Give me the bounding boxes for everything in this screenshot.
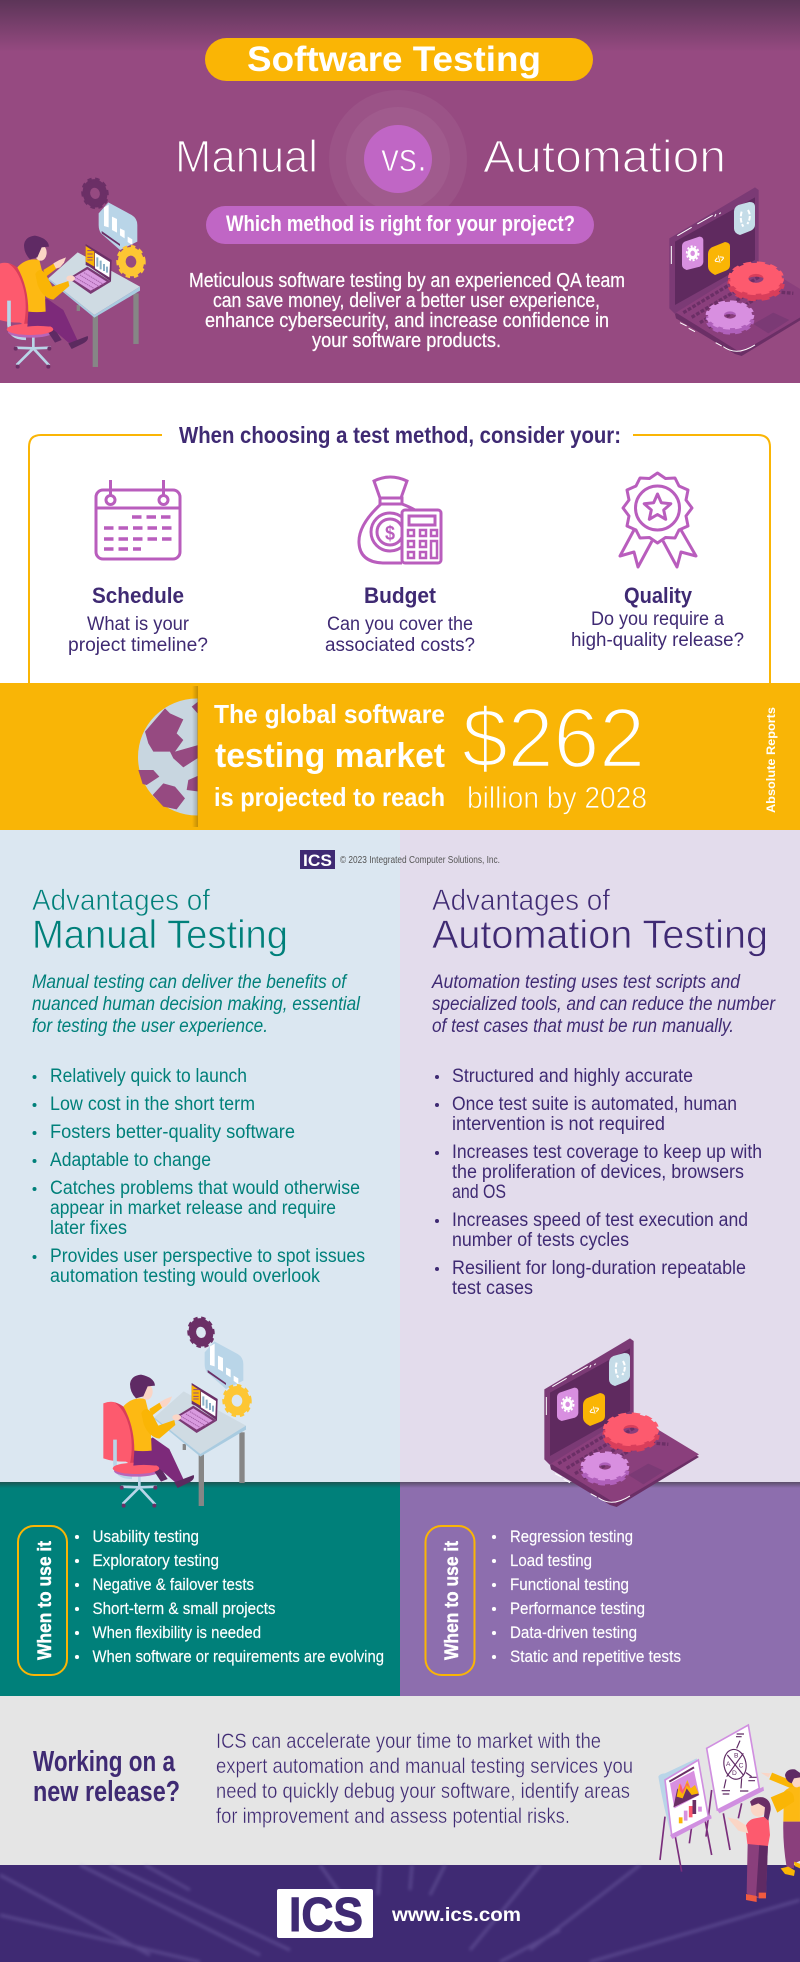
illustration: person at desk, lower: [103, 1315, 253, 1508]
heading: Automation Testing: [432, 913, 768, 957]
website: www.ics.com: [391, 1905, 521, 1926]
item: schedule: [68, 480, 208, 656]
use-case list: Functional testing: [510, 1575, 629, 1594]
panel: footer: [0, 1865, 800, 1962]
item: budget: Can you cover the: [327, 614, 473, 635]
panel: manual when to use: [0, 1482, 400, 1696]
stat lead-in text: testing market: [215, 737, 445, 775]
label: when to use it: When to use it: [35, 1540, 56, 1660]
heading: consider: When choosing a test method, consider your:: [179, 422, 621, 448]
bullet list: number of tests cycles: [452, 1230, 629, 1251]
CTA heading: Working on a: [33, 1746, 176, 1778]
stat unit: billion by 2028: [467, 780, 647, 815]
CTA paragraph: need to quickly debug your software, identify areas: [216, 1780, 630, 1803]
CTA heading: [33, 1746, 180, 1808]
bullet list: test cases: [452, 1278, 533, 1299]
illustration: team at easels: A: [726, 1761, 731, 1768]
intro paragraph: Meticulous software testing by an experienced QA team: [189, 270, 625, 292]
item: budget: Budget: [364, 583, 437, 608]
stat lead-in text: [214, 699, 445, 812]
illustration: team at easels: C: [739, 1762, 744, 1769]
title pill: Software Testing: [247, 40, 541, 79]
item: quality: Quality: [624, 583, 693, 608]
copyright logo and notice: ICS: [303, 851, 332, 870]
item: quality: Do you require a: [591, 609, 724, 630]
item: quality: high-quality release?: [571, 630, 744, 651]
illustration: team at easels: D: [732, 1770, 737, 1777]
label: when to use it: [426, 1526, 474, 1675]
description: [32, 972, 361, 1037]
heading: Manual: Manual: [175, 131, 318, 182]
panel: considerations: [0, 383, 800, 683]
item: budget: $: [385, 523, 395, 545]
use-case list: Short-term & small projects: [92, 1599, 276, 1618]
description: Manual testing can deliver the benefits of: [32, 972, 348, 993]
copyright logo and notice: © 2023 Integrated Computer Solutions, Inc.: [340, 855, 500, 866]
description: for testing the user experience.: [32, 1016, 268, 1037]
description: of test cases that must be run manually.: [432, 1016, 734, 1037]
panel: header: [0, 0, 800, 383]
bullet list: automation testing would overlook: [50, 1266, 320, 1287]
intro paragraph: your software products.: [312, 330, 501, 352]
illustration: team at easels: [658, 1725, 800, 1902]
bullet list: and OS: [452, 1182, 506, 1203]
ICS logo: ICS: [289, 1889, 363, 1942]
CTA paragraph: ICS can accelerate your time to market with the: [216, 1730, 601, 1753]
panel: automation when to use: [400, 1482, 800, 1696]
illustration: team at easels: B: [734, 1752, 739, 1759]
bullet list: the proliferation of devices, browsers: [452, 1162, 744, 1183]
item: budget: associated costs?: [325, 635, 475, 656]
stat lead-in text: is projected to reach: [214, 782, 445, 812]
CTA paragraph: expert automation and manual testing services you: [216, 1755, 633, 1778]
source: Absolute Reports: [764, 707, 778, 813]
heading: Advantages of: [32, 884, 211, 917]
bullet list: Structured and highly accurate: [452, 1066, 693, 1087]
panel: call to action: [0, 1696, 800, 1865]
label: when to use it: When to use it: [442, 1540, 463, 1660]
bullet list: Provides user perspective to spot issues: [50, 1246, 365, 1267]
description: nuanced human decision making, essential: [32, 994, 361, 1015]
heading: Automation: Automation: [483, 131, 726, 182]
use-case list: Negative & failover tests: [92, 1575, 254, 1594]
item: budget: [325, 477, 475, 656]
use-case list: [75, 1527, 384, 1666]
item: quality: [571, 473, 744, 651]
use-case list: Data-driven testing: [510, 1623, 637, 1642]
stat number: $262: [462, 691, 645, 785]
icon: calendar: [96, 480, 180, 559]
stat lead-in text: The global software: [214, 699, 445, 729]
item: schedule: Schedule: [92, 583, 184, 608]
bullet list: Resilient for long-duration repeatable: [452, 1258, 746, 1279]
heading: [32, 884, 288, 957]
bullet list: Once test suite is automated, human: [452, 1094, 737, 1115]
bullet list: Increases speed of test execution and: [452, 1210, 748, 1231]
illustration: laptop with gears, lower: [544, 1338, 699, 1507]
panel: market stat band: [0, 683, 800, 830]
bullet list: Fosters better-quality software: [50, 1122, 295, 1143]
panel: automation testing advantages: [400, 830, 800, 1482]
bullet list: Increases test coverage to keep up with: [452, 1142, 762, 1163]
use-case list: Usability testing: [92, 1527, 199, 1546]
question pill: [206, 206, 594, 244]
label: when to use it: [18, 1526, 67, 1675]
illustration: laptop with gears: [669, 187, 800, 356]
use-case list: When flexibility is needed: [92, 1623, 261, 1642]
bullet list: later fixes: [50, 1218, 127, 1239]
bullet list: Relatively quick to launch: [50, 1066, 247, 1087]
use-case list: Exploratory testing: [92, 1551, 219, 1570]
CTA paragraph: [216, 1730, 633, 1828]
icon: award ribbon: [620, 473, 696, 567]
use-case list: Performance testing: [510, 1599, 645, 1618]
bullet list: Adaptable to change: [50, 1150, 211, 1171]
panel: manual testing advantages: [0, 830, 400, 1482]
item: schedule: What is your: [87, 614, 190, 635]
item: schedule: project timeline?: [68, 635, 208, 656]
CTA heading: new release?: [33, 1776, 180, 1808]
bullet list: intervention is not required: [452, 1114, 665, 1135]
intro paragraph: enhance cybersecurity, and increase confidence in: [205, 310, 609, 332]
bullet list: Low cost in the short term: [50, 1094, 255, 1115]
copyright logo and notice: [300, 850, 500, 870]
CTA paragraph: for improvement and assess potential risks.: [216, 1805, 570, 1828]
bullet list: [435, 1066, 762, 1299]
title pill: [205, 38, 593, 81]
bullet list: [32, 1066, 365, 1287]
bullet list: Catches problems that would otherwise: [50, 1178, 360, 1199]
heading: Advantages of: [432, 884, 611, 917]
question pill: Which method is right for your project?: [226, 211, 575, 236]
description: [431, 972, 776, 1037]
use-case list: [492, 1527, 681, 1666]
bullet list: appear in market release and require: [50, 1198, 336, 1219]
use-case list: Static and repetitive tests: [510, 1647, 681, 1666]
heading: Manual Testing: [32, 913, 288, 957]
icon: globe: [138, 698, 198, 816]
vs badge with halo: [329, 90, 467, 228]
vs badge with halo: vs.: [381, 136, 427, 180]
use-case list: Load testing: [510, 1551, 592, 1570]
use-case list: When software or requirements are evolving: [92, 1647, 384, 1666]
intro paragraph: can save money, deliver a better user experience,: [213, 290, 600, 312]
intro paragraph: [189, 270, 625, 352]
icon: money bag and calculator: [359, 477, 441, 563]
illustration: person at desk: [0, 176, 147, 369]
description: Automation testing uses test scripts and: [431, 972, 741, 993]
use-case list: Regression testing: [510, 1527, 633, 1546]
heading: [432, 884, 768, 957]
